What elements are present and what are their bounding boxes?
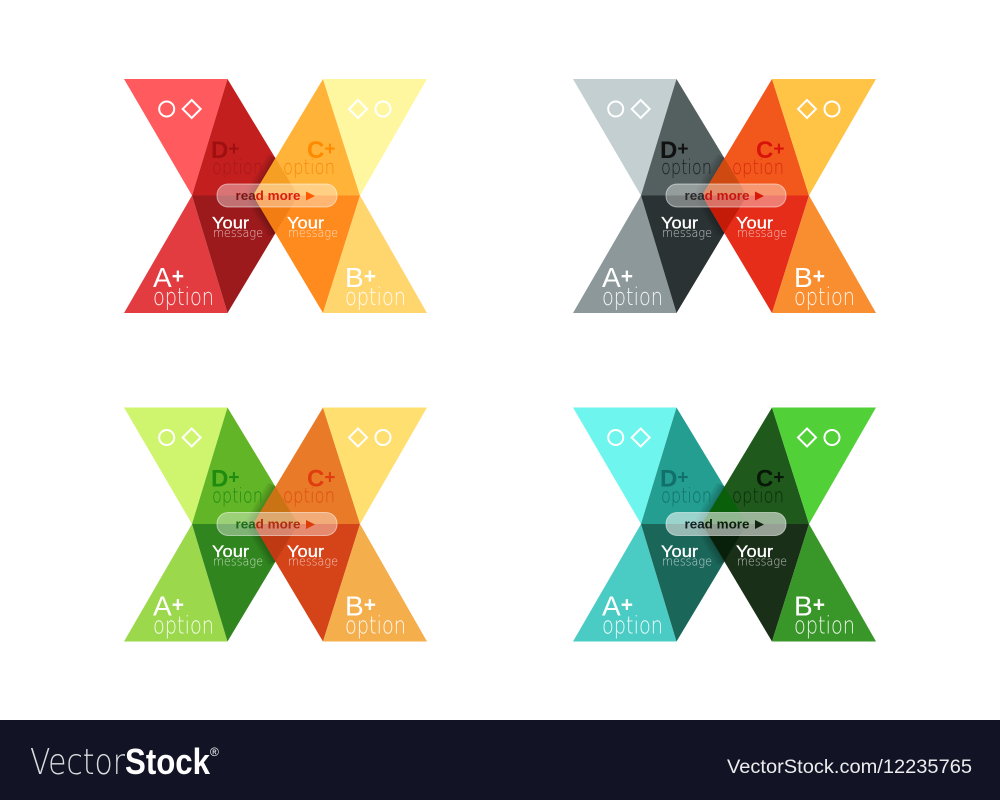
label: A option: option <box>153 283 214 311</box>
shape: bottom overlap <box>253 196 298 232</box>
label: A option: option <box>602 612 663 640</box>
label: B+: B <box>794 262 813 293</box>
label: B option: option <box>794 283 855 311</box>
shape: D triangle <box>641 408 747 524</box>
icon: circle right <box>824 430 840 445</box>
shape: dark teal message triangle <box>641 524 747 642</box>
shape: top-left triangle <box>573 408 676 524</box>
icon: diamond left <box>632 100 650 118</box>
button: read more <box>217 512 337 536</box>
shape: top overlap <box>702 487 747 524</box>
label: A option: option <box>602 283 663 311</box>
icon: circle left <box>608 102 623 116</box>
label: D+: D <box>660 137 677 164</box>
icon: diamond left <box>183 100 201 118</box>
shape: bottom-right B triangle <box>772 524 876 642</box>
label: B option: option <box>794 612 855 640</box>
icon: diamond right <box>349 100 367 118</box>
shape: dark green message triangle <box>192 524 298 642</box>
icon: diamond right <box>349 428 367 446</box>
button label: read more <box>236 188 300 203</box>
shape: bottom-left A triangle <box>573 524 676 642</box>
shape: C triangle <box>702 408 809 524</box>
shape: red message triangle <box>702 196 809 313</box>
label: D+: + <box>228 139 239 160</box>
button label: read more <box>236 516 300 532</box>
shape: top-right triangle <box>323 79 427 196</box>
icon: circle left <box>159 430 174 445</box>
shape: top overlap <box>702 158 747 196</box>
label: message left: message <box>213 226 263 240</box>
button body <box>666 512 786 536</box>
icon: button arrow <box>755 520 764 529</box>
label: D+: + <box>228 468 239 488</box>
label: C option: option <box>732 484 784 508</box>
logo: Vector: Vector <box>30 742 125 783</box>
footer background <box>0 720 1000 800</box>
shape: dark message triangle <box>641 196 747 313</box>
label: B+: + <box>813 594 825 616</box>
icon: circle right <box>376 430 390 445</box>
label: D+: D <box>211 137 228 164</box>
label: A+: A <box>602 262 621 293</box>
button: read more <box>666 184 786 207</box>
icon: diamond right <box>798 100 816 118</box>
icon: diamond left <box>183 428 201 446</box>
button label: read more <box>684 188 750 203</box>
label: message right: message <box>737 226 787 240</box>
shape: top-right triangle <box>323 408 427 524</box>
label: Your left: Your <box>661 214 698 232</box>
button label: read more <box>684 516 750 532</box>
logo: Stock: Stock <box>125 741 211 782</box>
panel: teal and green X diagram <box>573 408 876 642</box>
label: B+: + <box>364 594 376 616</box>
shape: D triangle <box>641 79 747 196</box>
label: C option: option <box>283 155 335 179</box>
footer bar <box>0 720 1000 800</box>
label: B option: option <box>345 612 406 640</box>
label: C+: C <box>756 466 773 492</box>
label: C option: option <box>732 155 784 179</box>
label: A+: A <box>153 262 172 293</box>
label: A option: option <box>153 612 214 640</box>
label: C+: + <box>773 468 784 488</box>
shape: bottom-right B triangle <box>323 196 427 313</box>
label: D+: D <box>211 466 228 492</box>
label: Your left: Your <box>661 542 698 561</box>
button: read more <box>666 512 786 536</box>
shape: top overlap <box>253 487 298 524</box>
label: D+: + <box>677 468 688 488</box>
shape: dark red message triangle <box>192 196 298 313</box>
icon: button arrow <box>306 520 315 529</box>
label: Your right: Your <box>287 214 324 232</box>
label: B+: B <box>345 262 364 293</box>
label: C+: C <box>756 137 773 164</box>
panel: lime and orange X diagram <box>124 408 427 642</box>
label: message right: message <box>288 226 338 240</box>
shape: top-right triangle <box>772 408 876 524</box>
button body <box>666 184 786 207</box>
icon: circle left <box>159 102 174 116</box>
label: B+: + <box>813 265 825 288</box>
label: D option: option <box>661 484 712 508</box>
shape: bottom-left A triangle <box>573 196 676 313</box>
label: C+: + <box>773 139 784 160</box>
button: read more <box>217 184 337 207</box>
label: message right: message <box>288 554 338 568</box>
label: Your left: Your <box>212 542 249 561</box>
shape: dark green message triangle <box>702 524 809 642</box>
label: Your right: Your <box>736 214 773 232</box>
shape: D triangle <box>192 79 298 196</box>
shape: top-left triangle <box>124 79 228 196</box>
label: C+: + <box>324 468 335 488</box>
shape: bottom-right B triangle <box>323 524 427 642</box>
shape: C triangle <box>702 79 809 196</box>
label: D+: + <box>677 139 688 160</box>
shape: bottom-left A triangle <box>124 524 228 642</box>
label: A+: + <box>172 265 184 288</box>
label: D option: option <box>661 155 712 179</box>
shape: orange message triangle <box>253 196 360 313</box>
label: A+: + <box>172 594 184 616</box>
label: A+: A <box>602 590 621 622</box>
shape: red-orange message triangle <box>253 524 360 642</box>
shape: C triangle <box>253 79 360 196</box>
shape: bottom overlap <box>253 524 298 561</box>
shape: bottom-right B triangle <box>772 196 876 313</box>
icon: button arrow <box>306 192 315 200</box>
shape: top-left triangle <box>573 79 676 196</box>
label: Your left: Your <box>212 214 249 232</box>
label: C option: option <box>283 484 335 508</box>
logo: registered mark: ® <box>210 745 219 759</box>
label: B+: + <box>364 265 376 288</box>
label: D+: D <box>660 466 677 492</box>
label: D option: option <box>212 484 263 508</box>
shape: bottom-left A triangle <box>124 196 228 313</box>
label: D option: option <box>212 155 263 179</box>
label: B+: B <box>794 590 813 622</box>
label: C+: C <box>307 466 324 492</box>
icon: circle right <box>824 102 840 116</box>
shape: top overlap <box>253 158 298 196</box>
shape: D triangle <box>192 408 298 524</box>
label: Your right: Your <box>736 542 773 561</box>
button body <box>217 184 337 207</box>
icon: circle right <box>376 102 390 116</box>
icon: button arrow <box>755 192 764 200</box>
label: A+: + <box>621 594 633 616</box>
label: message left: message <box>662 554 712 568</box>
shape: bottom overlap <box>702 524 747 561</box>
label: Your right: Your <box>287 542 324 561</box>
footer image id: VectorStock.com/12235765 <box>727 757 972 778</box>
icon: diamond right <box>798 428 816 446</box>
label: message left: message <box>213 554 263 568</box>
label: A+: + <box>621 265 633 288</box>
label: C+: C <box>307 137 324 164</box>
label: C+: + <box>324 139 335 160</box>
shape: C triangle <box>253 408 360 524</box>
shape: top-left triangle <box>124 408 228 524</box>
label: message right: message <box>737 554 787 568</box>
label: B option: option <box>345 283 406 311</box>
panel: red and yellow X diagram <box>124 79 427 313</box>
label: message left: message <box>662 226 712 240</box>
icon: diamond left <box>632 428 650 446</box>
icon: circle left <box>608 430 623 445</box>
label: B+: B <box>345 590 364 622</box>
panel: grey and orange X diagram <box>573 79 876 313</box>
shape: bottom overlap <box>702 196 747 232</box>
button body <box>217 512 337 536</box>
label: A+: A <box>153 590 172 622</box>
shape: top-right triangle <box>772 79 876 196</box>
